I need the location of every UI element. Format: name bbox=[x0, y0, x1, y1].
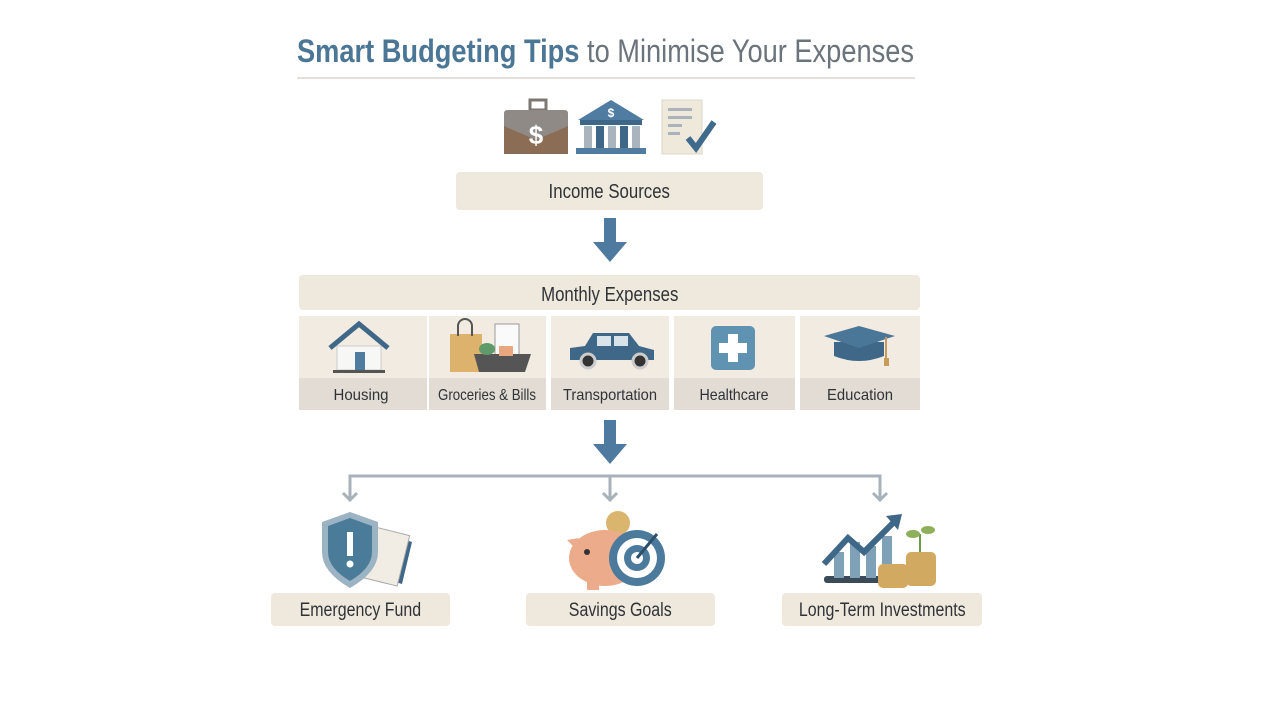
tile: groceries: Groceries & Bills bbox=[438, 387, 536, 404]
tile: healthcare bbox=[674, 316, 795, 410]
tile: education: Education bbox=[827, 387, 893, 404]
box: savings goals bbox=[526, 593, 715, 626]
icon: briefcase: $ bbox=[529, 120, 544, 150]
tile: education bbox=[800, 316, 920, 410]
icon: bank: $ bbox=[608, 106, 615, 120]
box: savings goals: Savings Goals bbox=[569, 600, 672, 621]
box: emergency fund bbox=[271, 593, 450, 626]
box: income sources: Income Sources bbox=[549, 181, 670, 203]
icon: document check bbox=[662, 100, 714, 154]
arrow 1 bbox=[593, 218, 627, 262]
icon: investments chart bbox=[822, 514, 936, 588]
box: monthly expenses bbox=[299, 275, 920, 310]
icon: emergency shield bbox=[322, 512, 412, 588]
branch arrows bbox=[342, 474, 888, 502]
arrow 2 bbox=[593, 420, 627, 464]
icons: income bbox=[504, 98, 716, 154]
icon: piggy bank target bbox=[567, 511, 665, 590]
box: monthly expenses: Monthly Expenses bbox=[541, 284, 678, 306]
panel: expense tiles bbox=[299, 316, 920, 410]
tile: transportation bbox=[551, 316, 669, 410]
tile: housing bbox=[299, 316, 427, 410]
tile: groceries bbox=[429, 316, 546, 410]
box: long-term investments: Long-Term Investments bbox=[799, 600, 965, 621]
box: income sources bbox=[456, 172, 763, 210]
tile: transportation: Transportation bbox=[563, 387, 657, 404]
box: long-term investments bbox=[782, 593, 982, 626]
tile: housing: Housing bbox=[334, 387, 388, 404]
tile: healthcare: Healthcare bbox=[700, 387, 769, 404]
icon: briefcase bbox=[504, 100, 568, 154]
box: emergency fund: Emergency Fund bbox=[300, 600, 421, 621]
icon: bank bbox=[576, 100, 646, 154]
